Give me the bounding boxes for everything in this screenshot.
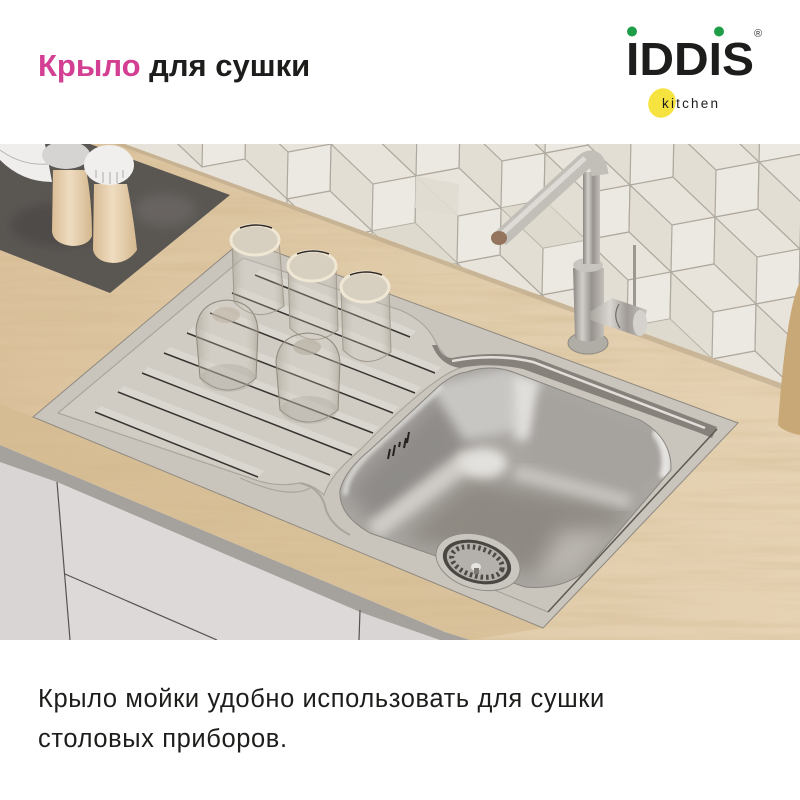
wall tiles [0,58,800,446]
faucet [491,158,647,354]
sink body [33,240,738,628]
glass 5 [276,333,340,424]
title: Крыло для сушки [38,48,310,83]
logo: IDDIS kitchen [626,26,762,118]
overflow slots [388,432,409,459]
description text [38,685,605,753]
glass 3 [341,272,391,362]
drain strainer [429,524,527,600]
glass 1 [231,225,284,315]
logo wordmark: ® [754,28,762,40]
logo yellow blob [643,84,681,122]
logo wordmark: IDDIS [626,33,754,85]
description text: Крыло мойки удобно использовать для сушки [38,685,605,713]
wooden board [778,282,800,435]
back rim channel [432,345,717,612]
glass 4 [196,300,258,392]
description text: столовых приборов. [38,725,288,753]
drainer ribs [95,269,441,477]
slate mat [0,144,230,293]
pepper mills [42,141,137,263]
logo kitchen label: kitchen [662,96,720,111]
cabinet fronts [0,445,470,640]
glass 2 [288,251,338,340]
plates [0,144,52,182]
photo: kitchen sink with glasses on drainer [0,144,800,640]
sink basin [340,368,671,587]
wooden countertop [0,144,800,640]
